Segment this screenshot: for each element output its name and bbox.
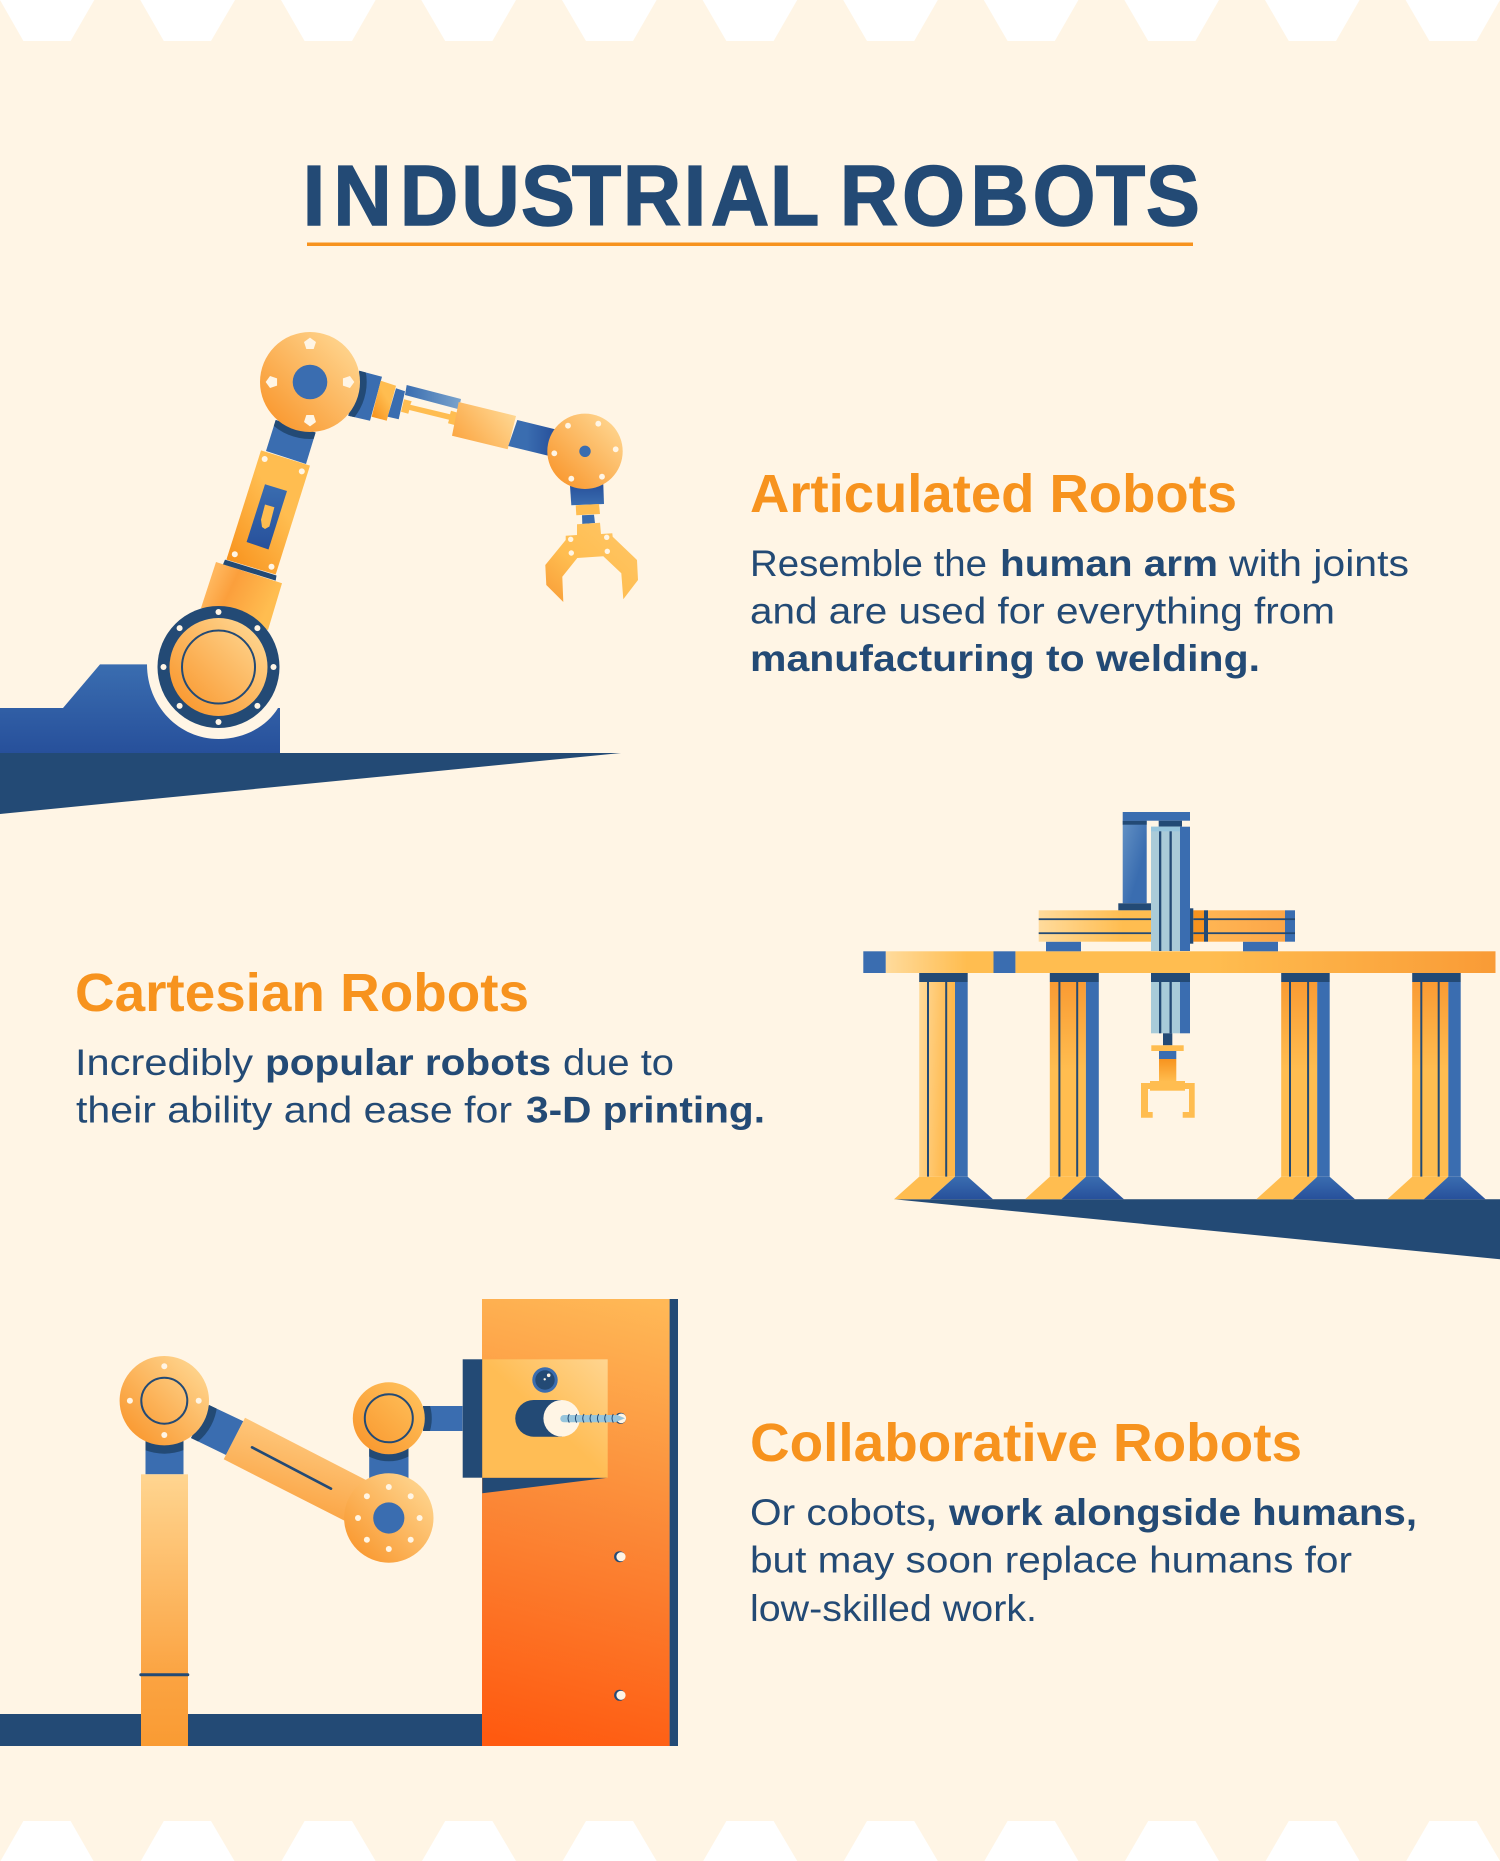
text: collaborative robots: , (926, 1492, 936, 1533)
text: articulated robots: with joints (1228, 543, 1409, 584)
cabinet (482, 1299, 670, 1746)
text: collaborative robots: low-skilled work. (750, 1588, 1037, 1629)
wrist collar (576, 504, 600, 515)
arm bolts (232, 456, 305, 570)
column 4 (1387, 973, 1486, 1199)
text: articulated robots: Resemble the (750, 543, 987, 584)
floor wedge (0, 753, 621, 814)
column 3 (1256, 973, 1355, 1199)
mount block (463, 1359, 482, 1478)
column 2 (1025, 973, 1124, 1199)
column below table (1151, 973, 1190, 1033)
arm window (247, 484, 287, 550)
wrist joint (547, 414, 623, 489)
vertical blue link (369, 1448, 408, 1478)
joint: top left (120, 1356, 209, 1445)
window glyph (261, 504, 274, 529)
forearm blue (508, 420, 555, 456)
text: collaborative robots: but may soon replace humans for (750, 1540, 1352, 1581)
text: cartesian robots: their ability and ease for (76, 1090, 512, 1131)
text: articulated robots: and are used for everything from (750, 591, 1335, 632)
vertical light-blue column (1151, 827, 1190, 951)
diagonal arm (224, 1418, 366, 1521)
yellow piston (401, 399, 458, 425)
text: articulated robots (750, 464, 1409, 679)
top zigzag border (0, 0, 1500, 41)
gripper (545, 523, 638, 602)
bottom zigzag border (0, 1821, 1500, 1861)
cabinet side (670, 1299, 678, 1746)
text: collaborative robots: work alongside humans, (948, 1492, 1417, 1533)
horizontal blue link (423, 1406, 462, 1431)
elbow small blue (388, 388, 405, 419)
illustration: articulated robot (0, 325, 638, 814)
elbow blue segment (348, 370, 382, 421)
shoulder neck (266, 420, 316, 464)
elbow orange collar (372, 381, 396, 421)
rear blue column (1118, 812, 1190, 910)
screw bit (560, 1413, 626, 1424)
text: cartesian robots (75, 963, 765, 1131)
horizontal rail (1039, 908, 1295, 944)
text: cartesian robots: due to (563, 1042, 674, 1083)
arm collar stripe (223, 560, 276, 581)
cabinet hole 1 (614, 1551, 626, 1562)
gripper bolts (568, 535, 610, 556)
camera (532, 1367, 558, 1393)
illustration: cartesian robot (863, 812, 1500, 1259)
joint: top right (353, 1382, 425, 1454)
blue diagonal link (191, 1405, 244, 1455)
vertical post (139, 1474, 189, 1746)
text: collaborative robots: Or cobots (750, 1492, 926, 1533)
text: articulated robots: human arm (1000, 543, 1218, 584)
column 1 (894, 973, 993, 1199)
wrist stem (582, 515, 595, 524)
text: cartesian robots: 3-D printing. (526, 1090, 765, 1131)
tool head (1141, 1033, 1195, 1118)
head shadow (482, 1478, 608, 1493)
tool barrel (515, 1400, 580, 1437)
lower arm segment (201, 562, 282, 630)
wrist neck (570, 484, 604, 505)
text: articulated robots: Articulated Robots (750, 464, 1237, 524)
shoulder joint (260, 332, 360, 432)
joint: elbow (344, 1473, 433, 1563)
upper arm segment (226, 450, 310, 574)
text: cartesian robots: Incredibly (75, 1042, 254, 1083)
upper rod (405, 385, 461, 409)
title: INDUSTRIAL ROBOTS (303, 148, 1200, 243)
text: collaborative robots (750, 1413, 1417, 1629)
head plate (482, 1359, 608, 1478)
table top (863, 951, 1496, 973)
blue base (0, 664, 280, 753)
text: cartesian robots: Cartesian Robots (75, 963, 529, 1023)
post neck (146, 1441, 184, 1474)
carriage feet (1046, 942, 1278, 951)
base wheel (158, 606, 280, 728)
floor wedge (894, 1199, 1500, 1259)
illustration: collaborative robot (0, 1299, 678, 1746)
text: articulated robots: manufacturing to welding. (750, 638, 1260, 679)
text: cartesian robots: popular robots (265, 1042, 551, 1083)
floor bar (0, 1714, 482, 1746)
cabinet hole 2 (614, 1690, 626, 1701)
text: collaborative robots: Collaborative Robots (750, 1413, 1302, 1473)
forearm block (452, 402, 516, 449)
